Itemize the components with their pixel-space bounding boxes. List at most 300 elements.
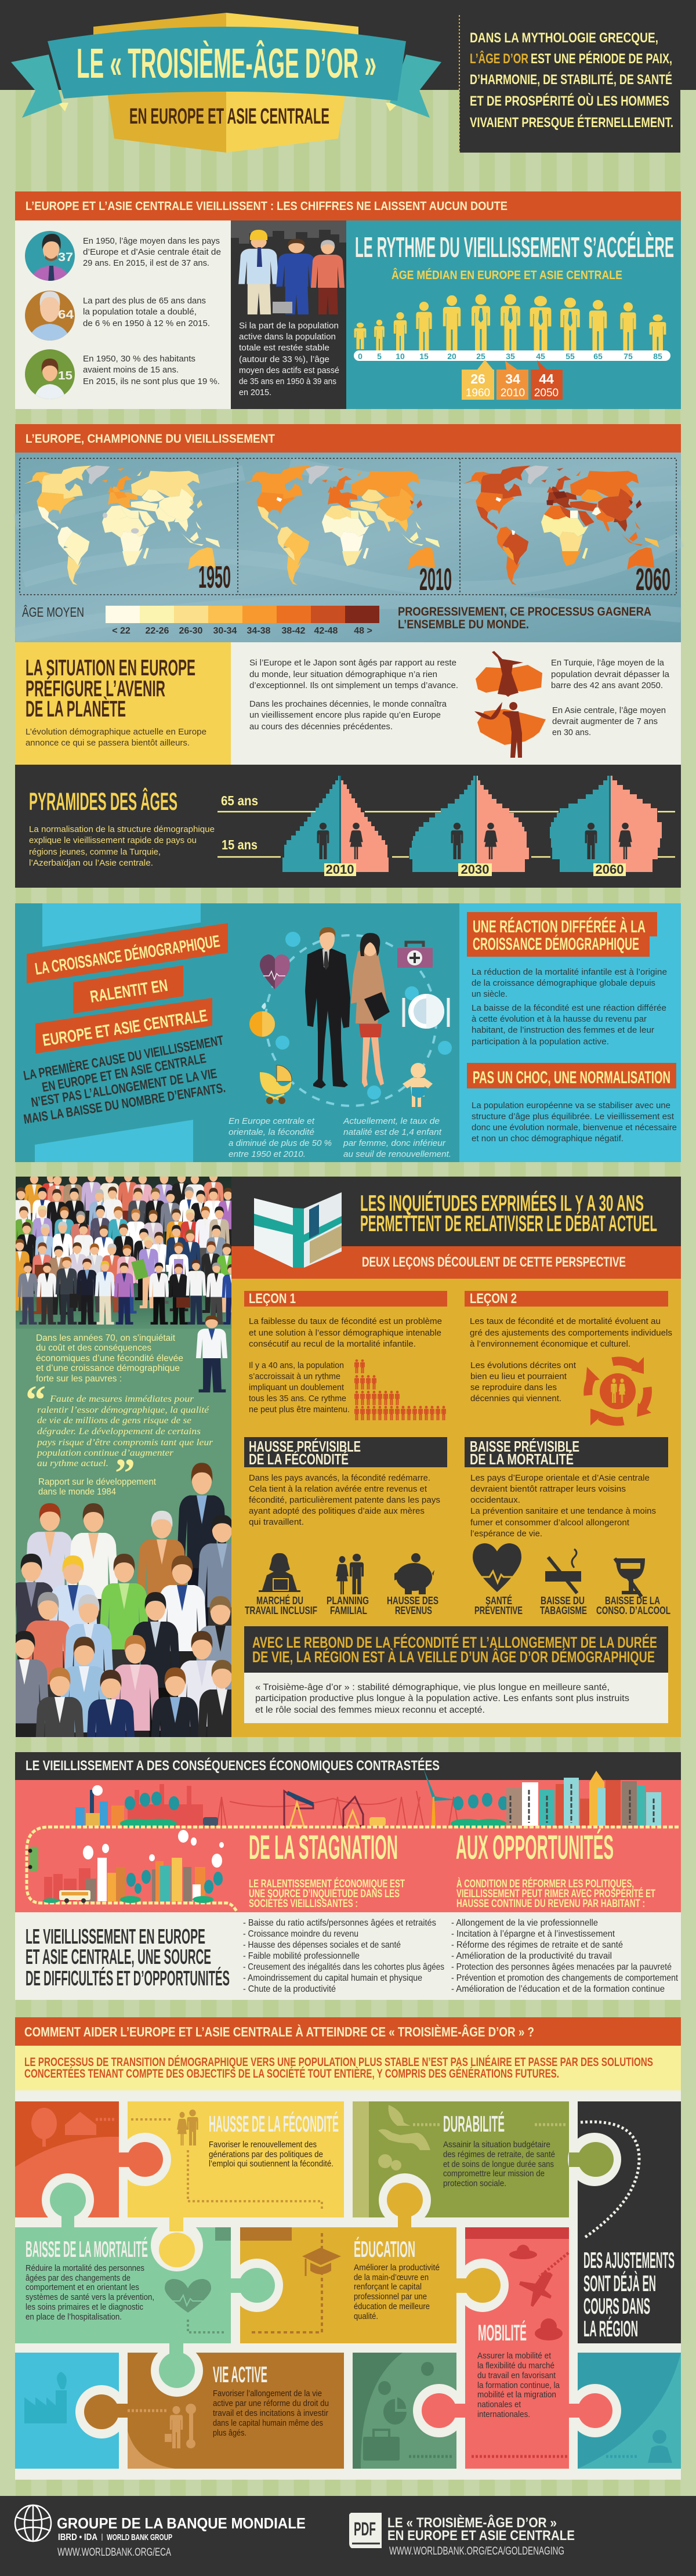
World Bank text: [57, 2515, 306, 2559]
section heading: conséquences économiques: [15, 1752, 681, 1780]
legend: 26-30: [179, 626, 203, 636]
panel: la croissance démographique: [15, 903, 459, 1162]
text: labour force: moyen des actifs est passé: [239, 366, 339, 375]
piece: éducation: de la main-d’œuvre en: [354, 2273, 429, 2282]
section heading: les chiffres: [15, 191, 681, 220]
age lines: 15 ans: [222, 837, 258, 852]
age lines: 65 ans: [221, 793, 258, 808]
icon: no alcohol: [615, 1558, 645, 1597]
list: difficulties: - Croissance moindre du revenu: [243, 1929, 358, 1939]
piece: baisse de la mortalité: les soins primaires et le diagnostic: [26, 2302, 143, 2312]
heading: LA SITUATION EN EUROPE: [26, 656, 195, 681]
definition box: [244, 1673, 668, 1723]
text: first cause: N’EST PAS L’ALLONGEMENT DE LA VIE: [30, 1066, 218, 1110]
puzzle connectors: [42, 2133, 621, 2438]
age scale: 20: [447, 352, 456, 361]
list: opportunities: - Protection des personnes âgées menacées par la pauvreté: [451, 1962, 672, 1972]
text: slowdown: UNE SOURCE D’INQUIÉTUDE DANS LES: [249, 1887, 400, 1900]
subheading: ÂGE MÉDIAN EN EUROPE ET ASIE CENTRALE: [392, 268, 622, 282]
text: explique le vieillissement rapide de pays ou: [29, 835, 197, 845]
icon: man 37: 37: [58, 251, 73, 264]
piece: hausse de la fécondité: générations par des politiques de: [209, 2150, 323, 2159]
banner: ralentit en: [73, 965, 183, 1014]
text 2: structure d’âge plus équilibrée. Le vieillissement est: [472, 1112, 675, 1121]
text: annonce ce qui se passera bientôt ailleurs.: [26, 738, 190, 748]
captions: a diminué de plus de 50 %: [229, 1138, 332, 1148]
piece: baisse de la mortalité: comportement et en orientant les: [26, 2282, 139, 2292]
text: un siècle.: [472, 989, 507, 999]
piece: mobilité: du travail en favorisant: [477, 2371, 556, 2380]
piece: des ajustements: [578, 2101, 681, 2343]
text: baisse: [470, 1473, 656, 1539]
heading: LE VIEILLISSEMENT EN EUROPE: [26, 1924, 205, 1948]
text: Turkey: barre des 42 ans avant 2050.: [551, 681, 663, 690]
subtitle: EN EUROPE ET ASIE CENTRALE: [129, 104, 329, 129]
icon: senior 64: [25, 291, 75, 342]
icon labels: PRÉVENTIVE: [474, 1604, 523, 1616]
section heading: championne: [15, 424, 681, 453]
piece: vie active: dans le capital humain même des: [213, 2418, 323, 2428]
text: slowdown: [249, 1877, 405, 1910]
callout: 26 in 1960: 26: [470, 371, 485, 386]
list: difficulties: - Hausse des dépenses sociales et de santé: [243, 1940, 401, 1950]
header: baisse prévisible: DE LA MORTALITÉ: [470, 1450, 574, 1468]
text: Turkey: [551, 658, 670, 690]
text: labour force: Si la part de la population: [239, 321, 339, 331]
text 2: donc une évolution normale, bienvenue et nécessaire: [472, 1123, 677, 1133]
pyramid 2010: [282, 776, 389, 877]
lesson 1 text: Il y a 40 ans, la population: [249, 1361, 344, 1370]
age scale: 75: [624, 352, 633, 361]
piece: durabilité: [353, 2101, 569, 2217]
piece: durabilité: et de soins de longue durée sans: [443, 2159, 554, 2169]
piece: mobilité: MOBILITÉ: [478, 2320, 527, 2346]
piece: baisse de la mortalité: BAISSE DE LA MORTALITÉ: [26, 2237, 148, 2262]
lesson 1 header: [244, 1291, 447, 1307]
text: under 15: avaient moins de 15 ans.: [83, 365, 179, 375]
text: Turkey: population devrait dépasser la: [551, 670, 670, 679]
age scale: 45: [536, 352, 545, 361]
illustration: lower city: [28, 1830, 224, 1903]
lesson 2 header: LEÇON 2: [470, 1291, 517, 1307]
text: Central Asia: En Asie centrale, l’âge moyen: [552, 705, 666, 715]
text: La réduction de la mortalité infantile est à l’origine: [472, 967, 667, 977]
piece: baisse de la mortalité: âgées par des changements de: [26, 2273, 130, 2283]
banner: la croissance démographique: [27, 923, 228, 983]
report link: [387, 2515, 575, 2557]
list: difficulties: - Amoindrissement du capital humain et physique: [243, 1973, 422, 1983]
list: difficulties: - Chute de la productivité: [243, 1984, 336, 1994]
heading: PYRAMIDES DES ÂGES: [29, 787, 177, 816]
panel: puzzle: HAUSSE DE LA FÉCONDITÉ: [209, 2111, 339, 2137]
icon: piggy bank: [394, 1553, 434, 1594]
piece: hausse de la fécondité: [128, 2101, 344, 2217]
icon labels: BAISSE DU: [541, 1595, 585, 1607]
banner: Europe et Asie centrale: EUROPE ET ASIE CENTRALE: [41, 1007, 209, 1050]
lesson 2 text: à l’environnement économique et culturel.: [470, 1339, 630, 1349]
text: 1970s concern: économiques d’une fécondité élevée: [36, 1354, 183, 1363]
quote: de vie de millions de gens risque de se: [37, 1416, 191, 1426]
text: [472, 967, 667, 1047]
pyramid 2060: 2060: [596, 862, 624, 877]
text: first cause: [22, 1032, 226, 1127]
icon labels: [245, 1594, 670, 1616]
report link: WWW.WORLDBANK.ORG/ECA/GOLDENAGING: [389, 2545, 564, 2557]
map: 1950: [24, 465, 220, 585]
World Bank text: IBRD • IDA: [58, 2532, 97, 2542]
definition box: participation productive plus longue à la population active. Les enfants sont plus instruits: [255, 1694, 629, 1703]
heading: [26, 656, 195, 722]
legend: 34-38: [247, 626, 271, 636]
panel: une réaction différée: [459, 903, 681, 1162]
panel: workers: [231, 220, 346, 409]
lesson 2 text: [470, 1316, 672, 1403]
callout: 44 in 2050: 44: [539, 371, 554, 386]
list: difficulties: - Baisse du ratio actifs/personnes âgées et retraités: [243, 1918, 436, 1928]
text: labour force: de 35 ans en 1950 à 39 ans: [239, 377, 336, 386]
age scale: 25: [476, 352, 485, 361]
text: participation à la population active.: [472, 1037, 609, 1047]
text: median age: d’Europe et d’Asie centrale était de: [83, 247, 221, 257]
section heading: les chiffres: L’EUROPE ET L’ASIE CENTRALE VIEILLISSENT : LES CHIFFRES NE LAISSENT AUCUN DOUTE: [26, 200, 507, 213]
list: difficulties: [243, 1918, 444, 1994]
captions: entre 1950 et 2010.: [229, 1149, 306, 1159]
panel: crowd and report quote: [16, 1177, 231, 1737]
heading: DE LA PLANÈTE: [26, 696, 126, 722]
panel: puzzle: [15, 2090, 681, 2480]
icon: Central Asia falconer: [474, 702, 546, 758]
piece: baisse de la mortalité: en place de l’hospitalisation.: [26, 2312, 122, 2322]
text: baisse: l’espérance de vie.: [470, 1529, 542, 1539]
illustration: doctor: [196, 1315, 227, 1392]
text: over 65: de 6 % en 1950 à 12 % en 2015.: [83, 319, 210, 328]
list: opportunities: - Réforme des régimes de retraite et de santé: [451, 1940, 623, 1950]
text: Turkey: En Turquie, l’âge moyen de la: [551, 658, 665, 668]
text: progressively: [398, 605, 651, 631]
text: Central Asia: [552, 705, 666, 737]
text: Japan and Europe: au cours des décennies précédentes.: [249, 722, 393, 732]
text: median age: 29 ans. En 2015, il est de 37 ans.: [83, 258, 209, 268]
text: 1970s concern: Dans les années 70, on s’inquiétait: [36, 1333, 176, 1343]
piece: baisse de la mortalité: [15, 2227, 231, 2343]
text: [26, 727, 206, 748]
World Bank text: WWW.WORLDBANK.ORG/ECA: [57, 2546, 171, 2559]
chart: population doubling figures: [354, 1359, 446, 1420]
text: report source: [38, 1477, 157, 1497]
text: first cause: LA PREMIÈRE CAUSE DU VIEILLISSEMENT: [22, 1032, 224, 1083]
text: report source: dans le monde 1984: [38, 1487, 116, 1497]
text: slowdown: SOCIÉTÉS VIEILLISSANTES :: [249, 1897, 358, 1910]
icon labels: TABAGISME: [540, 1605, 587, 1616]
text: Japan and Europe: du monde, leur situation démographique n’a rien: [249, 670, 437, 679]
icon: stroller: [260, 1065, 292, 1104]
icon: medical bag: [397, 942, 433, 968]
text: 1970s concern: et d’une croissance démographique: [36, 1363, 180, 1373]
callout: 26 in 1960: 1960: [466, 387, 490, 399]
icon: cycle with family: [586, 1357, 651, 1426]
piece: mobilité: nationales et: [477, 2400, 521, 2409]
illustration: crowd bottom: [0, 1463, 247, 1842]
list: opportunities: - Allongement de la vie professionnelle: [451, 1918, 598, 1928]
icon: no smoking: [545, 1549, 581, 1593]
lesson 2 text: Les évolutions décrites ont: [470, 1361, 577, 1370]
piece: durabilité: DURABILITÉ: [443, 2111, 505, 2137]
piece: vie active: VIE ACTIVE: [213, 2362, 267, 2387]
banner: la croissance démographique: LA CROISSANCE DÉMOGRAPHIQUE: [34, 931, 221, 979]
lesson 1 text: impliquant un doublement: [249, 1383, 345, 1392]
icon labels: HAUSSE DES: [387, 1595, 438, 1607]
text: over 65: La part des plus de 65 ans dans: [83, 296, 206, 306]
World Bank text: WORLD BANK GROUP: [107, 2532, 172, 2542]
age lines: [217, 793, 675, 857]
piece: hausse de la fécondité: l’emploi qui soutiennent la fécondité.: [209, 2159, 334, 2169]
list: opportunities: - Amélioration de l’éducation et de la formation continue: [451, 1984, 665, 1994]
panel: age statistics: [15, 220, 231, 409]
quote: “: [26, 1378, 46, 1423]
piece: vie active: travail et des incitations à investir: [213, 2408, 328, 2418]
piece: baisse de la mortalité: Réduire la mortalité des personnes: [26, 2263, 144, 2273]
heading: PRÉFIGURE L’AVENIR: [26, 676, 165, 701]
panel: difficultés et opportunités: [15, 1912, 681, 2000]
piece: éducation: professionnel par une: [354, 2292, 427, 2302]
piece: éducation: [240, 2227, 456, 2343]
text: report source: Rapport sur le développement: [38, 1477, 157, 1487]
lesson 1 text: ne peut plus être maintenu.: [249, 1405, 350, 1414]
text: first cause: MAIS LA BAISSE DU NOMBRE D’ENFANTS.: [23, 1080, 226, 1127]
pyramid 2030: 2030: [461, 862, 489, 877]
captions: [229, 1116, 451, 1159]
panel: la situation en Europe: [15, 642, 231, 765]
age scale: 35: [506, 352, 515, 361]
callout: 44 in 2050: [531, 360, 563, 400]
age scale: 0: [358, 352, 362, 361]
intro band: [15, 2046, 681, 2090]
icon: PDF book: [349, 2513, 382, 2548]
main title: LE « TROISIÈME-ÂGE D’OR »: [77, 40, 376, 87]
pyramid 2030: [409, 776, 529, 877]
age scale: 15: [419, 352, 429, 361]
text: under 15: En 1950, 30 % des habitants: [83, 354, 195, 364]
title ribbon: [11, 13, 441, 153]
piece: woman at laptop: [578, 2353, 681, 2469]
text: 1970s concern: [36, 1333, 183, 1384]
icon labels: REVENUS: [395, 1605, 432, 1616]
text: régions jeunes, comme la Turquie,: [29, 847, 161, 857]
captions: par femme, donc inférieur: [343, 1138, 446, 1148]
lesson 1 text: et une solution à l’essor démographique intenable: [249, 1328, 441, 1338]
captions: Actuellement, le taux de: [343, 1116, 440, 1126]
piece: mobilité: [465, 2227, 569, 2469]
illustration: crowd top: [16, 1177, 231, 1329]
chart: ageing figures: [354, 294, 666, 350]
text: Japan and Europe: d’exceptionnel. Ils ont simplement un temps d’avance.: [249, 681, 458, 690]
quote: population continue d’augmenter: [37, 1448, 174, 1458]
lesson 2 text: Les taux de fécondité et de mortalité évoluent au: [470, 1316, 661, 1326]
road: [27, 1827, 679, 1912]
text: over 65: la population totale a doublé,: [83, 307, 197, 317]
piece: vie active: [91, 2353, 344, 2469]
text: progressively: L’ENSEMBLE DU MONDE.: [398, 618, 529, 631]
legend: < 22: [112, 626, 130, 636]
lesson 2 text: décennies qui viennent.: [470, 1394, 561, 1403]
text: l’Azerbaïdjan ou l’Asie centrale.: [29, 858, 153, 868]
legend: 30-34: [213, 626, 237, 636]
icon: family planning: [336, 1554, 364, 1594]
piece: éducation: renforçant le capital: [354, 2282, 422, 2292]
heading banner: [467, 912, 657, 957]
panel: stagnation / opportunities: [15, 1768, 681, 1912]
icon: young 15: 15: [58, 370, 72, 382]
text: baisse: Les pays d’Europe orientale et d’Asie centrale: [470, 1473, 650, 1483]
header: hausse prévisible: [244, 1437, 447, 1468]
panel: reste du monde: [231, 642, 681, 765]
quote: pays risque d’être compromis tant que leur: [37, 1438, 213, 1448]
header: hausse prévisible: HAUSSE PRÉVISIBLE: [249, 1438, 361, 1455]
text: median age: [83, 236, 221, 268]
icon: senior 64: 64: [58, 308, 74, 321]
dashed ring: [266, 932, 452, 1106]
text: labour force: totale est restée stable: [239, 343, 329, 353]
illustration: man: [305, 927, 350, 1088]
year labels: [198, 560, 670, 597]
callout: 34 in 2010: 34: [505, 371, 520, 386]
text 2: La population européenne va se stabiliser avec une: [472, 1101, 670, 1110]
text: baisse: occidentaux.: [470, 1495, 520, 1505]
lesson 1 text: La faiblesse du taux de fécondité est un problème: [249, 1316, 442, 1326]
piece: vie active: active par une réforme du droit du: [213, 2398, 329, 2408]
piece: mobilité: mobilité et la migration: [477, 2390, 556, 2400]
section heading: comment aider: COMMENT AIDER L’EUROPE ET L’ASIE CENTRALE À ATTEINDRE CE « TROISIÈME-ÂGE D’OR » ?: [24, 2024, 534, 2039]
lesson 1 header: LEÇON 1: [249, 1291, 296, 1307]
legend: 48 >: [354, 626, 372, 636]
legend: 42-48: [314, 626, 338, 636]
piece: vie active: Favoriser l’allongement de la vie: [213, 2389, 322, 2398]
text: [29, 824, 215, 868]
age scale: 85: [653, 352, 662, 361]
text: progressively: PROGRESSIVEMENT, CE PROCESSUS GAGNERA: [398, 605, 651, 618]
definition box: « Troisième-âge d’or » : stabilité démographique, vie plus longue en meilleure santé,: [255, 1683, 610, 1692]
quote: ”: [115, 1451, 135, 1496]
piece: durabilité: Assainir la situation budgétaire: [443, 2140, 550, 2150]
lesson 2 header: [465, 1291, 668, 1307]
banner: Europe et Asie centrale: [35, 998, 212, 1054]
lesson 2 text: gré des ajustements des comportements individuels: [470, 1328, 672, 1338]
text: hausse: [249, 1473, 440, 1527]
section heading: championne: L’EUROPE, CHAMPIONNE DU VIEILLISSEMENT: [26, 432, 275, 446]
text: Japan and Europe: Dans les prochaines décennies, le monde connaîtra: [249, 699, 447, 709]
icon labels: PLANNING: [327, 1595, 369, 1607]
text: hausse: Cela tient à la relation avérée entre revenus et: [249, 1484, 427, 1494]
text: baisse: fumer et consommer d’alcool allongeront: [470, 1518, 630, 1528]
piece: briefcase: [353, 2353, 456, 2469]
callout: 44 in 2050: 2050: [534, 387, 559, 399]
icon labels: BAISSE DE LA: [605, 1595, 660, 1607]
text: hausse: qui travaillent.: [249, 1517, 304, 1527]
text: reform: [456, 1877, 655, 1910]
section heading: comment aider: [15, 2017, 681, 2046]
piece: éducation: ÉDUCATION: [354, 2237, 415, 2262]
section heading: conséquences économiques: LE VIEILLISSEMENT A DES CONSÉQUENCES ÉCONOMIQUES CONTRASTÉES: [26, 1757, 440, 1774]
report link: EN EUROPE ET ASIE CENTRALE: [387, 2528, 575, 2544]
panel: stagnation / opportunities: DE LA STAGNATION: [249, 1829, 398, 1866]
quote: au rythme actuel.: [37, 1459, 108, 1468]
panel: pyramides des âges: [15, 765, 681, 888]
text: first cause: EN EUROPE ET EN ASIE CENTRALE: [41, 1051, 207, 1095]
legend: 38-42: [282, 626, 306, 636]
icon: apple: [249, 1003, 275, 1037]
icon: preventive health: [471, 1543, 522, 1592]
piece: durabilité: protection sociale.: [443, 2179, 506, 2188]
World Bank text: GROUPE DE LA BANQUE MONDIALE: [57, 2515, 306, 2532]
callout: 34 in 2010: [496, 361, 528, 400]
illustration: three workers: [231, 220, 346, 314]
heading: DE DIFFICULTÉS ET D’OPPORTUNITÉS: [26, 1966, 230, 1990]
legend: ÂGE MOYEN: [22, 605, 84, 620]
report link: LE « TROISIÈME-ÂGE D’OR »: [387, 2515, 557, 2531]
text: Japan and Europe: Si l’Europe et le Japon sont âgés par rapport au reste: [249, 658, 456, 668]
quote: Faute de mesures immédiates pour: [49, 1394, 194, 1404]
banner: ralentit en: RALENTIT EN: [89, 976, 169, 1007]
icon: plate: [404, 994, 448, 1029]
piece: mobilité: Assurer la mobilité et: [477, 2351, 552, 2361]
text: labour force: en 2015.: [239, 388, 271, 397]
legend: 22-26: [146, 626, 169, 636]
icon labels: MARCHÉ DU: [256, 1594, 303, 1607]
text: habitant, de l’instruction des femmes et de leur: [472, 1025, 654, 1035]
text: hausse: fécondité, particulièrement patente dans les pays: [249, 1495, 440, 1505]
quote: dégrader. Le développement de certains: [37, 1427, 201, 1437]
icon: man 37: [25, 231, 75, 284]
piece: durabilité: compromettre leur mission de: [443, 2169, 545, 2179]
piece: mobilité: la formation continue, la: [477, 2380, 560, 2390]
illustration: top skyline: [75, 1768, 661, 1828]
header: baisse prévisible: [465, 1437, 668, 1468]
text: Central Asia: devrait augmenter de 7 ans: [552, 717, 658, 726]
piece: mobilité: la flexibilité du marché: [477, 2361, 554, 2371]
piece: vie active: plus âgés.: [213, 2428, 246, 2438]
text: à cette évolution et à la hausse du revenu par: [472, 1014, 647, 1024]
captions: natalité est de 1,4 enfant: [343, 1127, 442, 1137]
lesson 2 text: se reproduire dans les: [470, 1383, 557, 1392]
header: hausse prévisible: DE LA FÉCONDITÉ: [249, 1450, 349, 1468]
piece: hausse de la fécondité: Favoriser le renouvellement des: [209, 2140, 317, 2150]
icon: PDF book: PDF: [354, 2519, 376, 2539]
legend: [22, 605, 379, 636]
pyramid 2010: 2010: [326, 862, 354, 877]
text: under 15: En 2015, ils ne sont plus que 19 %.: [83, 377, 220, 386]
panel: les inquiétudes: [231, 1177, 681, 1737]
text: labour force: [239, 321, 339, 397]
icon: inclusive labour market: [259, 1553, 300, 1592]
text: Japan and Europe: [249, 658, 458, 732]
captions: au seuil de renouvellement.: [343, 1149, 451, 1159]
text: 1970s concern: du coût et des conséquences: [36, 1343, 151, 1353]
icon: baby: [403, 1063, 433, 1107]
piece: durabilité: des régimes de retraite, de santé: [443, 2150, 555, 2159]
header: baisse prévisible: BAISSE PRÉVISIBLE: [470, 1438, 579, 1455]
text 2: et non un choc démographique négatif.: [472, 1134, 624, 1144]
heading: [26, 1924, 230, 1990]
callout: 34 in 2010: 2010: [501, 387, 525, 399]
year labels: 2010: [419, 562, 452, 597]
icon: young 15: [25, 349, 75, 401]
text: slowdown: LE RALENTISSEMENT ÉCONOMIQUE EST: [249, 1877, 405, 1890]
lesson 2 text: bien eu lieu et pourraient: [470, 1372, 567, 1381]
illustration: woman: [351, 933, 390, 1087]
callout: âge d'or démographique: [244, 1626, 668, 1673]
piece: house corner: [15, 2101, 119, 2217]
quote: [26, 1378, 213, 1496]
